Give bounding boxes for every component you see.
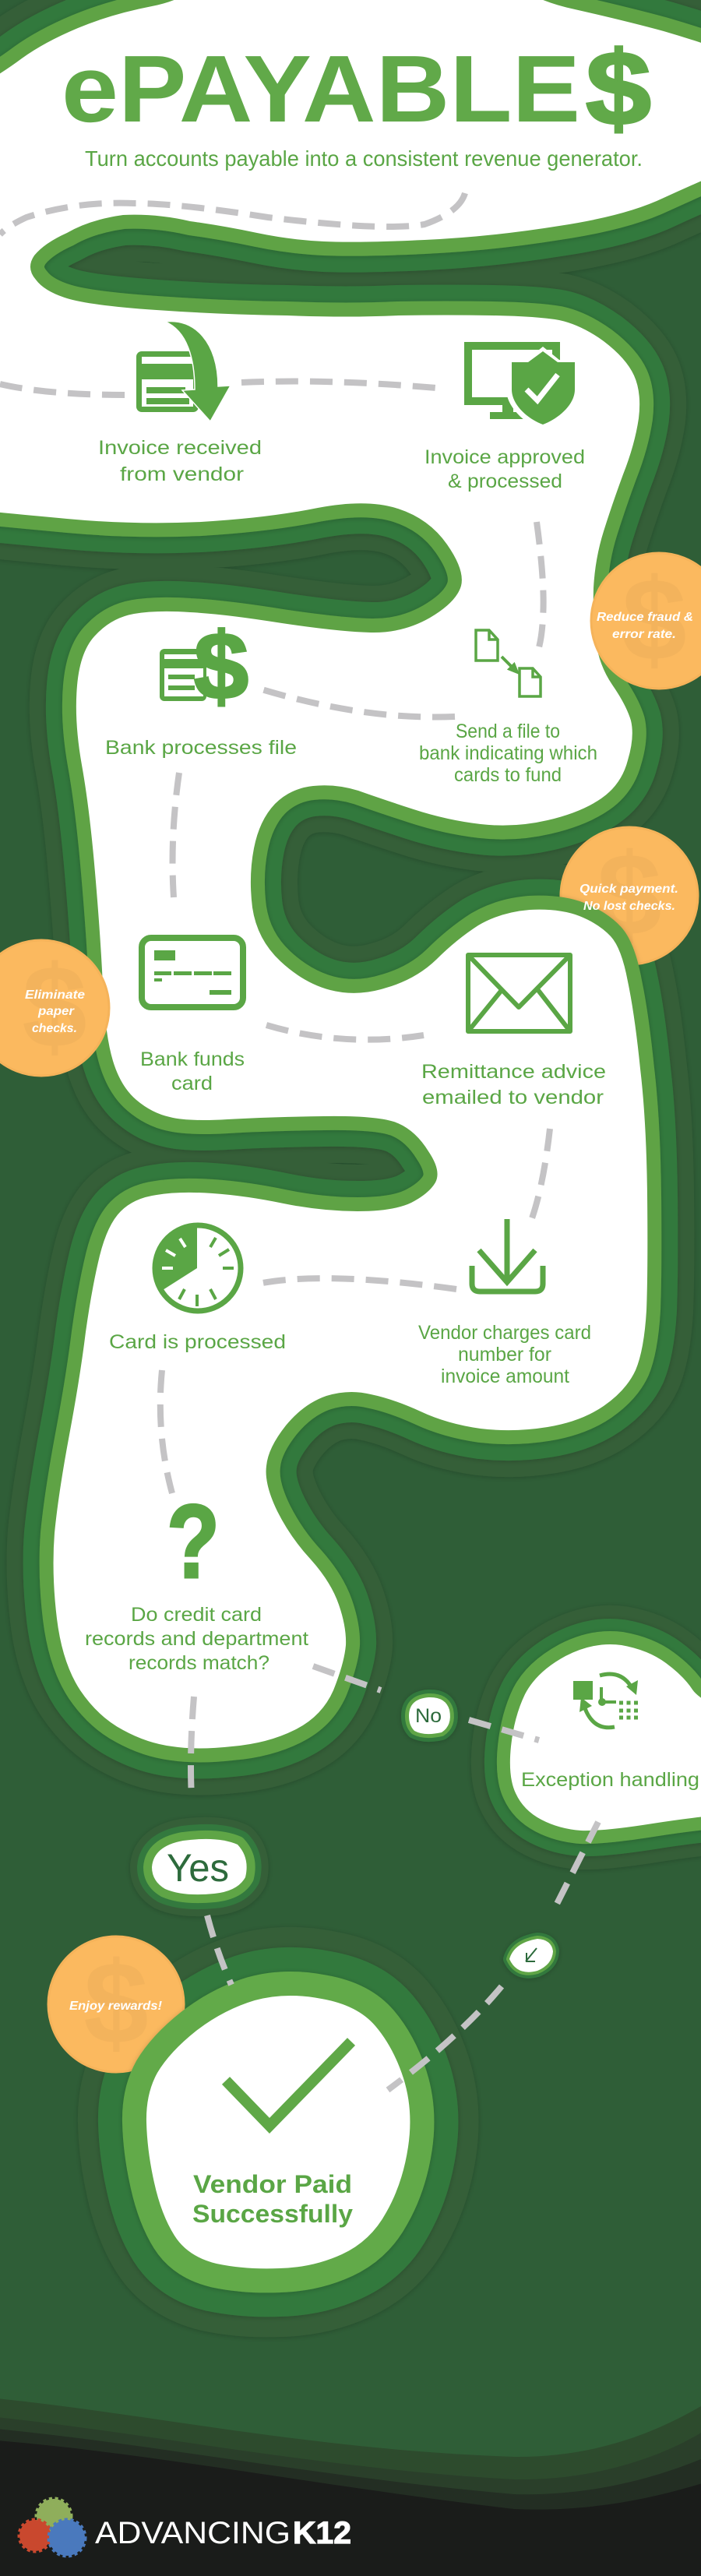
- icon: envelope: [468, 955, 570, 1031]
- coin: reduce fraud: Reduce fraud &: [597, 611, 693, 624]
- label: do records match: [85, 1604, 308, 1674]
- subtitle: Turn accounts payable into a consistent revenue generator.: [85, 146, 643, 171]
- icon: invoice card with arrow: [136, 321, 231, 421]
- coin: eliminate paper checks: [0, 940, 109, 1076]
- label: do records match: Do credit card: [131, 1604, 262, 1626]
- coin text: quick payment: No lost checks.: [583, 900, 675, 913]
- icon: exception handling: [573, 1674, 638, 1728]
- coin text: enjoy rewards: Enjoy rewards!: [69, 2000, 163, 2013]
- label: card is processed: Card is processed: [109, 1331, 286, 1353]
- label: vendor paid successfully: Successfully: [192, 2200, 353, 2228]
- label: vendor charges card: Vendor charges card: [418, 1322, 591, 1344]
- icon: bank card and dollar: [160, 613, 248, 719]
- label: yes: Yes: [167, 1846, 229, 1890]
- label: invoice approved: Invoice approved: [424, 446, 585, 468]
- label: send a file: [419, 721, 597, 786]
- label: send a file: Send a file to: [456, 721, 560, 742]
- label: bank funds card: card: [171, 1073, 213, 1094]
- coin: reduce fraud: [591, 553, 701, 689]
- coin: quick payment: [561, 827, 698, 964]
- title: $: [586, 30, 651, 147]
- coin: eliminate paper checks: Eliminate: [25, 988, 85, 1002]
- label: remittance advice: Remittance advice: [421, 1061, 606, 1083]
- icon: bank card and dollar: $: [194, 613, 248, 719]
- label: do records match: records match?: [129, 1652, 269, 1674]
- label: remittance advice: [421, 1061, 606, 1108]
- label: vendor paid successfully: Vendor Paid: [193, 2170, 352, 2198]
- panel: main path outer bands: [0, 0, 701, 1748]
- label: vendor charges card: number for: [458, 1344, 551, 1366]
- icon: clock: [155, 1225, 241, 1311]
- arrow badge shape: [509, 1939, 553, 1972]
- label: vendor charges card: invoice amount: [441, 1366, 569, 1387]
- label: do records match: records and department: [85, 1628, 308, 1650]
- label: invoice approved: & processed: [448, 470, 562, 492]
- icon: check mark: [226, 2042, 351, 2126]
- panel: vendor paid outer bands: [146, 1996, 410, 2268]
- icon: small arrow: [526, 1948, 537, 1961]
- coin: reduce fraud: $: [622, 554, 687, 685]
- label: exception handling: Exception handling: [521, 1769, 699, 1791]
- label: bank funds card: [140, 1048, 245, 1094]
- coin: enjoy rewards: $: [83, 1937, 149, 2068]
- label: vendor charges card: [418, 1322, 591, 1387]
- label: invoice approved: [424, 446, 585, 492]
- panel: vendor paid light band and white area: [146, 1996, 410, 2268]
- coin: eliminate paper checks: $: [22, 941, 87, 1072]
- icon: file transfer: [476, 630, 541, 696]
- coin text: quick payment: Quick payment.: [579, 883, 678, 896]
- icon: monitor with shield: [464, 342, 579, 430]
- label: no: No: [415, 1705, 442, 1727]
- coin text: quick payment: [579, 883, 678, 913]
- icon: bank funds card: [142, 938, 243, 1007]
- label: bank funds card: Bank funds: [140, 1048, 245, 1070]
- label: bank processes file: Bank processes file: [105, 737, 297, 759]
- no badge shape: [409, 1697, 450, 1734]
- label: invoice received: Invoice received: [98, 437, 262, 459]
- label: invoice received: [98, 437, 262, 485]
- panel: footer layers: [0, 2398, 701, 2576]
- logo: advancing k12: K12: [293, 2516, 351, 2550]
- panel: main path light band and white area: [0, 0, 701, 1748]
- yes badge shape: [152, 1839, 247, 1894]
- label: send a file: cards to fund: [454, 764, 562, 786]
- label: send a file: bank indicating which: [419, 742, 597, 764]
- logo: advancing k12: ADVANCING: [95, 2516, 291, 2550]
- coin: enjoy rewards: [48, 1936, 184, 2072]
- logo: advancing k12: [19, 2499, 351, 2556]
- dashed flow connectors: [0, 193, 598, 2090]
- panel: exception handling blob: [510, 1644, 701, 1831]
- label: invoice received: from vendor: [120, 463, 244, 485]
- label: vendor paid successfully: [192, 2170, 353, 2228]
- label: remittance advice: emailed to vendor: [422, 1087, 604, 1108]
- icon: download tray: [472, 1219, 543, 1292]
- coin: eliminate paper checks: checks.: [32, 1022, 77, 1035]
- coin: quick payment: $: [597, 829, 662, 960]
- coin: reduce fraud: error rate.: [612, 628, 676, 641]
- coin: eliminate paper checks: paper: [37, 1005, 75, 1018]
- icon: question mark: ?: [167, 1484, 220, 1600]
- title: ePAYABLE: [62, 36, 580, 142]
